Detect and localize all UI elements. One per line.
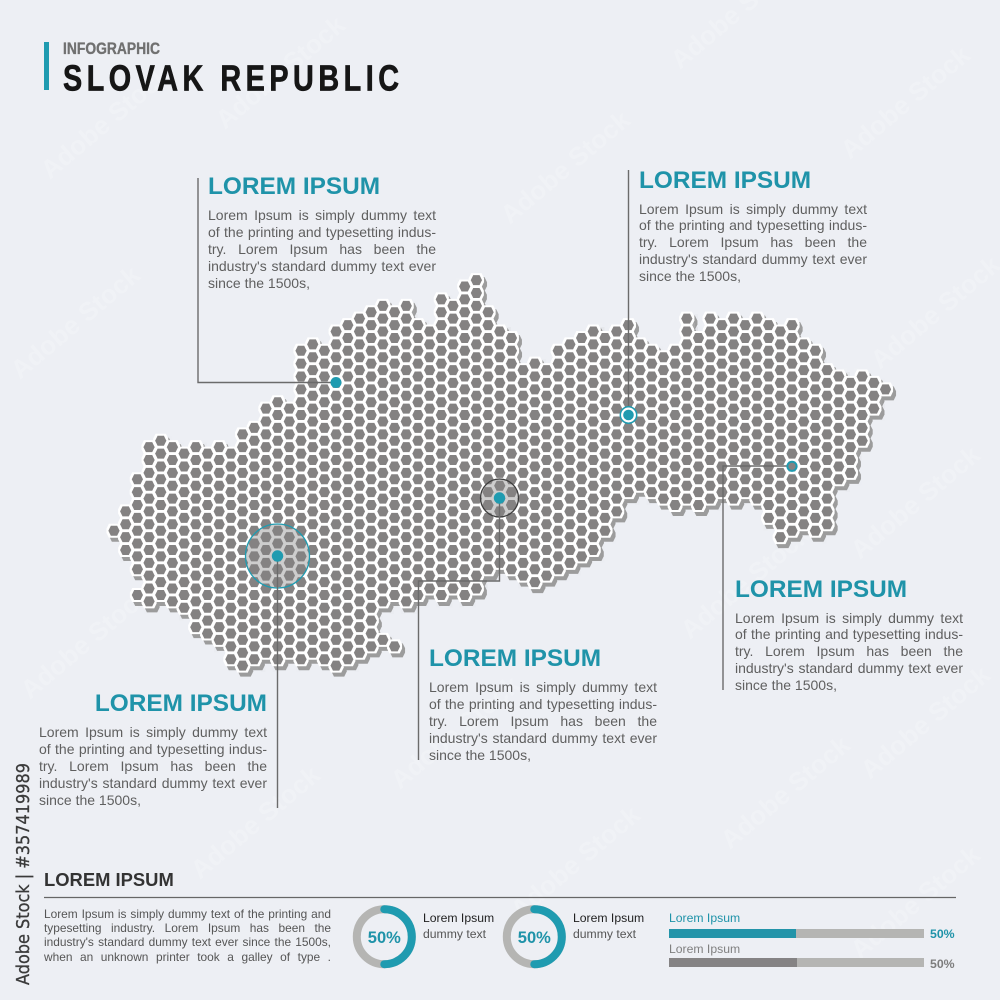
panel: north-east callout: LOREM IPSUM (639, 166, 811, 194)
leader line: south-west callout (276, 556, 278, 808)
watermark: Adobe Stock (5, 259, 146, 385)
panel: north-east callout (639, 166, 867, 284)
callout marker: centre highlight circle (480, 478, 520, 518)
donut label: second (573, 911, 644, 940)
panel: east callout: since the 1500s, (735, 677, 837, 693)
panel: south callout: since the 1500s, (429, 747, 531, 763)
panel: south callout: LOREM IPSUM (429, 645, 601, 672)
footer paragraph: industry's standard dummy text ever since the 1500s, (44, 935, 331, 949)
watermark: Adobe Stock (385, 669, 526, 795)
panel: south callout: industry's standard dummy text ever (429, 730, 657, 746)
panel: south callout (429, 645, 657, 763)
title kicker: INFOGRAPHIC (63, 39, 160, 58)
panel: east callout (735, 576, 963, 693)
donut chart: first 50%: 50% (368, 929, 401, 947)
panel: east callout: of the printing and typesetting indus- (735, 626, 963, 642)
panel: north-west callout (208, 173, 436, 291)
donut label: second: Lorem Ipsum (573, 911, 644, 925)
donut chart: second 50%: 50% (518, 929, 551, 947)
watermark: Adobe Stock (495, 104, 636, 230)
watermark: Adobe Stock (855, 659, 996, 785)
watermark: Adobe Stock (35, 59, 176, 185)
panel: north-east callout: try. Lorem Ipsum has been the (639, 234, 867, 250)
footer paragraph (44, 906, 331, 964)
donut label: first: Lorem Ipsum (423, 911, 494, 925)
bar chart: grey bar (669, 957, 955, 971)
panel: east callout: Lorem Ipsum is simply dummy text (735, 610, 963, 626)
watermark: Adobe Stock (505, 799, 646, 925)
panel: north-west callout: Lorem Ipsum is simply dummy text (208, 207, 436, 223)
footer paragraph: typesetting industry. Lorem Ipsum has been the (44, 921, 331, 935)
panel: north-west callout: of the printing and typesetting indus- (208, 224, 436, 240)
title: SLOVAK REPUBLIC (63, 57, 399, 98)
watermark: Adobe Stock (185, 759, 326, 885)
donut label: first: dummy text (423, 926, 486, 940)
watermark: Adobe Stock (845, 439, 986, 565)
bar chart: grey bar: 50% (930, 957, 955, 971)
donut label: second: dummy text (573, 926, 636, 940)
donut chart: first 50% (357, 909, 412, 964)
vertical stock credit: Adobe Stock | #357419989 (14, 763, 34, 985)
footer paragraph: when an unknown printer took a galley of type . (44, 950, 331, 964)
icon: centre dot (494, 492, 505, 504)
panel: south-west callout: since the 1500s, (39, 792, 141, 808)
panel: south-west callout: try. Lorem Ipsum has been the (39, 758, 267, 774)
panel: north-east callout: industry's standard dummy text ever (639, 251, 867, 267)
leader line: east callout (723, 466, 791, 690)
bar label: teal: Lorem Ipsum (669, 911, 740, 925)
panel: south-west callout: industry's standard dummy text ever (39, 775, 267, 791)
icon: east ring dot (787, 462, 797, 471)
panel: south-west callout: Lorem Ipsum is simply dummy text (39, 724, 267, 740)
panel: south-west callout: LOREM IPSUM (95, 690, 267, 717)
icon: north-west dot (330, 377, 342, 388)
panel: north-west callout: since the 1500s, (208, 275, 310, 291)
watermark: Adobe Stock (675, 519, 816, 645)
donut chart: second 50% (507, 909, 562, 964)
panel: north-east callout: since the 1500s, (639, 268, 741, 284)
leader line: south callout (418, 498, 500, 760)
panel: east callout: try. Lorem Ipsum has been the (735, 643, 963, 659)
watermark: Adobe Stock (210, 9, 351, 135)
panel: south-west callout: of the printing and typesetting indus- (39, 741, 267, 757)
bar chart: teal bar (669, 927, 955, 941)
panel: east callout: LOREM IPSUM (735, 576, 907, 602)
footer heading: LOREM IPSUM (44, 869, 174, 890)
icon: north-east ring dot (620, 407, 637, 423)
panel: north-west callout: LOREM IPSUM (208, 173, 380, 200)
donut label: first (423, 911, 494, 940)
panel: east callout: industry's standard dummy text ever (735, 660, 963, 676)
watermark: Adobe Stock (15, 579, 156, 705)
leader line: north-west callout (198, 178, 336, 382)
panel: north-west callout: try. Lorem Ipsum has been the (208, 241, 436, 257)
bar label: grey: Lorem Ipsum (669, 942, 740, 956)
divider rule (44, 896, 956, 898)
panel: south callout: of the printing and typesetting indus- (429, 696, 657, 712)
bar chart: teal bar: 50% (930, 927, 955, 941)
panel: north-west callout: industry's standard dummy text ever (208, 258, 436, 274)
icon: west dot (272, 550, 283, 562)
footer paragraph: Lorem Ipsum is simply dummy text of the printing and (44, 906, 331, 920)
panel: north-east callout: of the printing and typesetting indus- (639, 217, 867, 233)
panel: south-west callout (39, 690, 267, 808)
icon: title accent bar (44, 42, 49, 90)
panel: south callout: try. Lorem Ipsum has been the (429, 713, 657, 729)
watermark: Adobe Stock (845, 839, 986, 965)
leader line: north-east callout (628, 170, 630, 415)
watermark: Adobe Stock (835, 39, 976, 165)
panel: south callout: Lorem Ipsum is simply dummy text (429, 679, 657, 695)
watermark: Adobe Stock (715, 729, 856, 855)
callout marker: west highlight circle (244, 523, 310, 589)
panel: north-east callout: Lorem Ipsum is simply dummy text (639, 200, 867, 216)
map: hexagon dot map of Slovakia (106, 273, 896, 677)
